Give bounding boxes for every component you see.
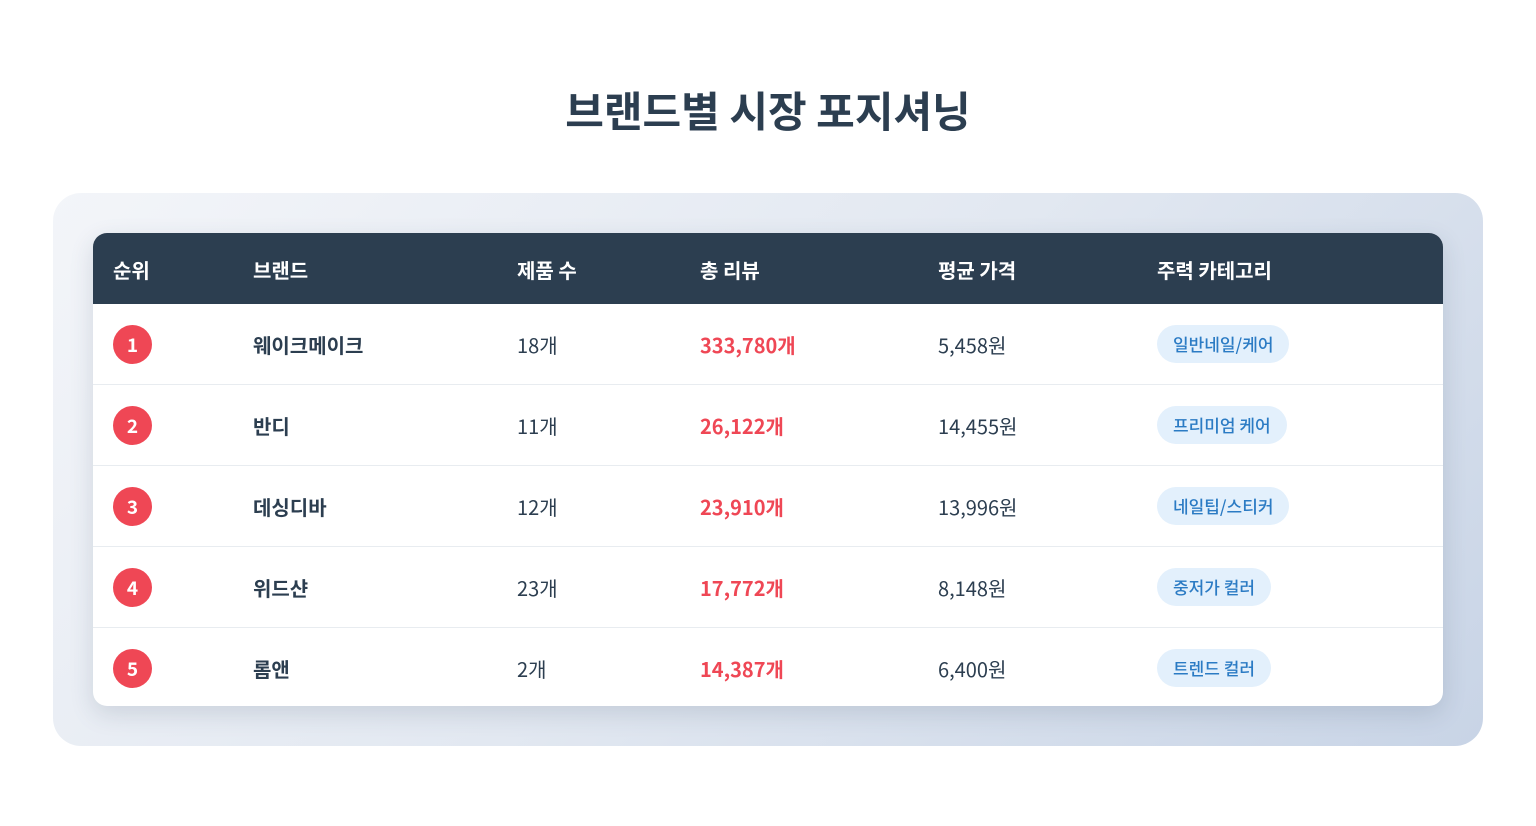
row 1: 웨이크메이크: [253, 330, 363, 359]
row 5: 트렌드 컬러: [1173, 655, 1255, 680]
row 2: 프리미엄 케어: [1173, 412, 1271, 437]
title: 브랜드별 시장 포지셔닝: [565, 79, 971, 140]
row 2: 14,455원: [938, 411, 1017, 440]
row 1: 일반네일/케어: [1173, 331, 1273, 356]
table header: 총 리뷰: [700, 255, 760, 284]
table header: 제품 수: [517, 255, 577, 284]
row 2: 2: [127, 412, 138, 439]
table header: 순위: [113, 255, 150, 284]
row 5: 14,387개: [700, 654, 784, 683]
row 4: 중저가 컬러: [1173, 574, 1255, 599]
row 1: 18개: [517, 330, 558, 359]
row 4: 17,772개: [700, 573, 784, 602]
row 2: 26,122개: [700, 411, 784, 440]
row 5: 2개: [517, 654, 546, 683]
row 1: 1: [127, 331, 138, 358]
row 5: [113, 649, 1271, 688]
panel: background card: [53, 193, 1483, 746]
table: [93, 233, 1443, 706]
row 1: 5,458원: [938, 330, 1006, 359]
row 2: [93, 385, 1443, 466]
row 1: [93, 304, 1443, 385]
table header: 주력 카테고리: [1157, 255, 1272, 284]
row 4: 위드샨: [253, 573, 308, 602]
row 4: 4: [127, 574, 138, 601]
row 3: 12개: [517, 492, 558, 521]
row 3: 23,910개: [700, 492, 784, 521]
row 4: 8,148원: [938, 573, 1006, 602]
row 5: 6,400원: [938, 654, 1006, 683]
row 2: 반디: [253, 411, 290, 440]
row 5: 롬앤: [253, 654, 290, 683]
row 3: 데싱디바: [253, 492, 327, 521]
row 4: [93, 547, 1443, 628]
row 5: 5: [127, 655, 138, 682]
row 3: 13,996원: [938, 492, 1017, 521]
table header: 평균 가격: [938, 255, 1016, 284]
row 3: 네일팁/스티커: [1173, 493, 1273, 518]
row 4: 23개: [517, 573, 558, 602]
row 3: 3: [127, 493, 138, 520]
row 2: 11개: [517, 411, 558, 440]
row 3: [93, 466, 1443, 547]
table header: 브랜드: [253, 255, 308, 284]
table header: [93, 233, 1443, 304]
row 1: 333,780개: [700, 330, 796, 359]
